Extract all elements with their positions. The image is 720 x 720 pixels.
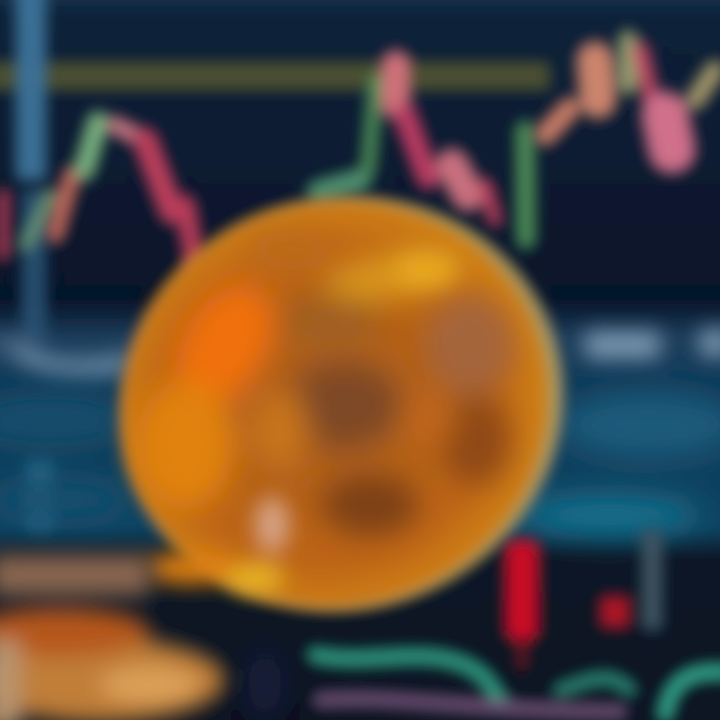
- red bars lower right: [505, 530, 662, 670]
- candlestick line centre: [318, 65, 526, 240]
- candlestick line right: [545, 40, 715, 150]
- water texture: [0, 391, 720, 535]
- coin pile lower left: [0, 555, 225, 720]
- candlestick line left: [3, 122, 198, 280]
- horizontal gold band: [0, 62, 550, 90]
- coin: [68, 142, 616, 666]
- green chart line lower right: [315, 655, 720, 715]
- coin body: [68, 145, 602, 663]
- pale horizontal bands: [0, 330, 720, 376]
- coin rim glow: [72, 142, 616, 666]
- dark shadow under coin: [241, 649, 289, 720]
- coin surface highlights: [135, 230, 515, 535]
- vertical blue line: [16, 0, 54, 530]
